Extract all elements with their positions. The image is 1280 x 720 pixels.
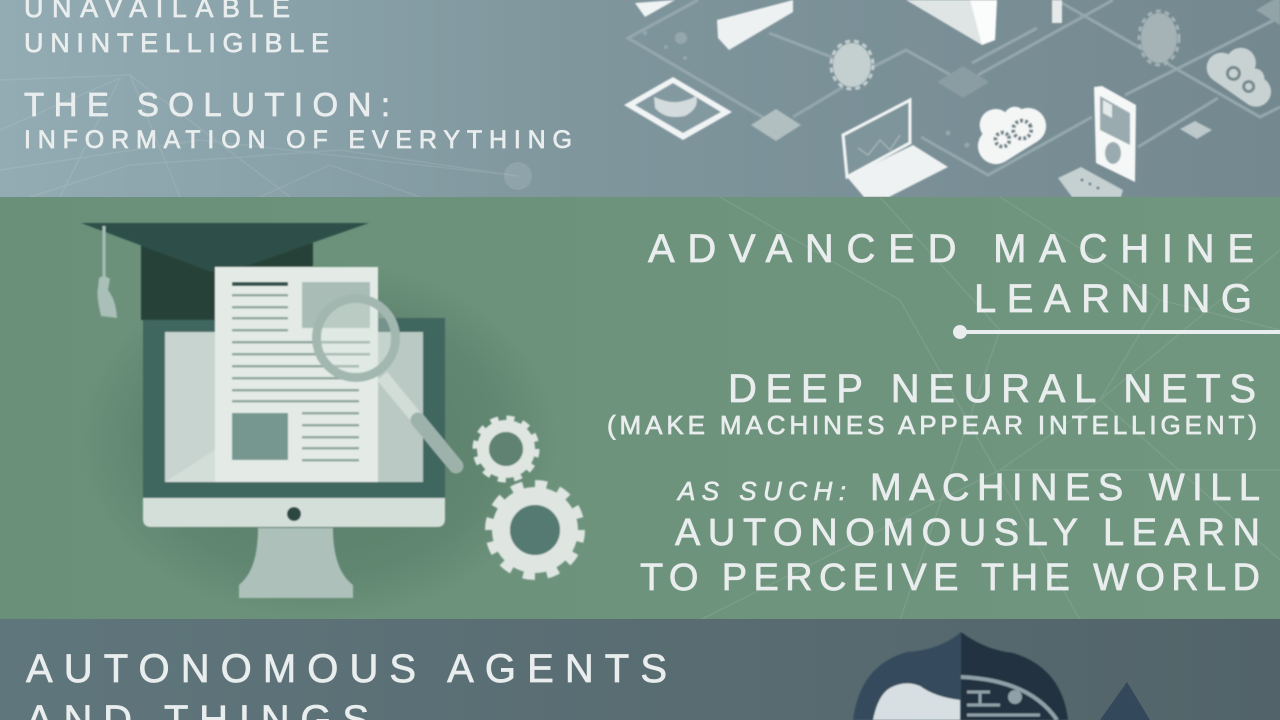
face: [873, 683, 960, 720]
icon: buildings server: [906, 0, 997, 45]
illustration: graduation computer: [81, 223, 579, 598]
illustration: connected devices network: [624, 0, 1280, 197]
heading: learning: LEARNING: [974, 277, 1252, 321]
panel: advanced machine learning: [0, 197, 1280, 620]
icon: magnifying glass: [316, 298, 456, 466]
text: as such: AS SUCH:: [676, 476, 846, 506]
text: unintelligible: UNINTELLIGIBLE: [24, 28, 329, 58]
text: make machines appear intelligent: (MAKE MACHINES APPEAR INTELLIGENT): [607, 410, 1257, 440]
text: autonomously learn: AUTONOMOUSLY LEARN: [675, 512, 1260, 554]
divider with dot: [953, 325, 1280, 339]
icon: laptop: [843, 100, 948, 197]
shield right half: [961, 632, 1068, 720]
icon: graduation cap: [81, 223, 369, 320]
icon: chip centre: [937, 66, 989, 98]
icon: phone: [1094, 86, 1136, 182]
circuit brain: [961, 677, 1057, 720]
icon: top left device: [635, 0, 675, 17]
icon: tablet with pie chart: [624, 77, 732, 140]
decorative neural lines: [700, 197, 1280, 620]
shield left half: [853, 632, 961, 720]
circuit lines: [628, 0, 1280, 175]
icon: router: [717, 0, 793, 50]
heading: advanced machine: ADVANCED MACHINE: [648, 227, 1254, 271]
small dots: [643, 31, 970, 148]
panel: information of everything: [0, 0, 1280, 197]
icon: right cloud: [1201, 34, 1280, 113]
icon: small diamond: [1180, 121, 1212, 139]
heading: the solution: THE SOLUTION:: [24, 86, 390, 123]
icon: right gear: [1139, 11, 1179, 65]
text: machines will: MACHINES WILL: [870, 467, 1260, 509]
panel: autonomous agents and things: [0, 619, 1280, 720]
text: to perceive the world: TO PERCEIVE THE WORLD: [640, 557, 1260, 599]
icon: chip left: [751, 109, 801, 141]
icon: droplet: [1100, 682, 1150, 720]
icon: message bubble: [1058, 167, 1123, 197]
icon: monitor body: [143, 318, 445, 498]
icon: monitor stand: [239, 528, 353, 598]
icon: document: [215, 267, 378, 482]
heading: autonomous agents: AUTONOMOUS AGENTS: [26, 647, 667, 691]
icon: top right chip: [1256, 0, 1280, 25]
icon: monitor chin: [143, 498, 445, 527]
icon shadow: [80, 260, 560, 620]
illustration: human robot head: [853, 632, 1068, 720]
icon: pillar: [1052, 0, 1062, 23]
icon: cloud with gears: [963, 88, 1053, 171]
decorative neural network: [0, 75, 532, 197]
icon: large gear: [491, 486, 579, 574]
heading: deep neural nets: DEEP NEURAL NETS: [728, 367, 1256, 411]
text: information of everything: INFORMATION OF EVERYTHING: [24, 126, 572, 154]
icon: small gear: [477, 420, 535, 478]
icon: top gear: [831, 41, 873, 89]
